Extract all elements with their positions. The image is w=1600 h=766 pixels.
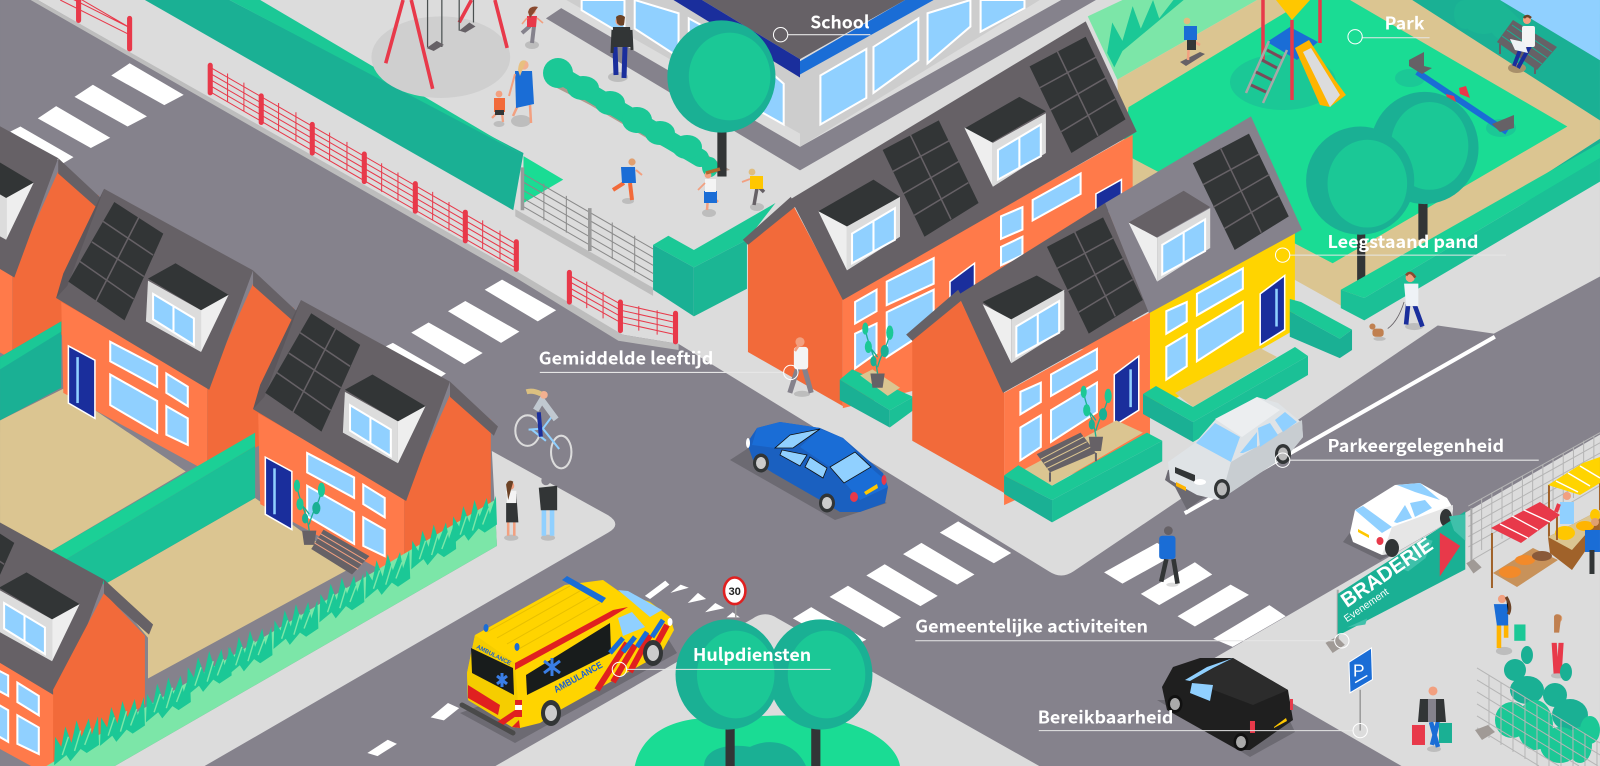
rear face	[467, 635, 520, 728]
bottom bush	[635, 716, 900, 766]
star of life	[497, 658, 560, 687]
trees: park	[1306, 92, 1479, 281]
grey fence gate	[515, 167, 653, 296]
sand path	[1117, 0, 1600, 306]
front wall	[843, 135, 1133, 408]
bench and plant: front orange house	[1037, 386, 1112, 482]
windscreen	[618, 590, 662, 617]
school blue trim	[673, 0, 800, 78]
solar panels	[1047, 217, 1143, 334]
label: Hulpdiensten	[612, 641, 831, 677]
dormer 2	[964, 97, 1046, 187]
white car	[1343, 483, 1453, 560]
blue car	[730, 422, 888, 520]
shadow	[730, 447, 887, 520]
roof dark part	[958, 203, 1149, 393]
planter: yellow house	[1143, 347, 1308, 442]
cyclist with bicycle	[515, 391, 571, 468]
windows and door	[855, 173, 1121, 368]
red fence: top left corner	[60, 0, 130, 49]
ambulance text side: AMBULANCE	[552, 660, 605, 696]
dormer right	[1129, 191, 1210, 282]
banner: braderie: Evenement	[1342, 587, 1391, 625]
seesaw	[1395, 52, 1516, 137]
house: far left	[0, 77, 106, 359]
plant and bench: front yard	[294, 480, 369, 574]
park: backdrop	[1088, 0, 1600, 306]
roof ridges	[487, 586, 600, 650]
tail light and headlight	[515, 618, 673, 717]
label: Park: Park	[1385, 10, 1425, 35]
label: School: School	[810, 9, 870, 34]
ambulance text rear: AMBULANCE	[475, 644, 512, 667]
label: Parkeergelegenheid	[1275, 432, 1539, 467]
person: woman walking dog	[1369, 273, 1423, 341]
windows	[1355, 483, 1440, 533]
lower side	[1382, 505, 1453, 555]
stall: yellow awning	[1548, 457, 1600, 570]
rear deck	[845, 467, 888, 500]
corner hedge near gate	[653, 203, 776, 316]
bush shade	[704, 742, 806, 766]
gable wall	[748, 201, 843, 406]
banner: braderie	[1325, 508, 1482, 653]
person: girl running	[698, 169, 720, 217]
speed limit sign 30: 30	[728, 586, 741, 598]
school building	[546, 0, 1096, 170]
person: man in black sweater	[608, 15, 632, 82]
body	[1168, 397, 1303, 500]
label: Bereikbaarheid	[1038, 703, 1367, 738]
roof	[1215, 397, 1280, 437]
body	[1350, 483, 1453, 555]
house: with solar panels, left	[56, 189, 301, 471]
top left green hedge	[145, 0, 563, 210]
label: Leegstaand pand	[1275, 228, 1506, 262]
grille and plate	[1175, 467, 1206, 491]
plate and rear lights	[1250, 699, 1293, 733]
stall: red awning	[1491, 502, 1560, 588]
label: Gemiddelde leeftijd	[539, 344, 798, 380]
hedge: between plots	[51, 433, 255, 585]
wheels	[1214, 444, 1291, 499]
person: man talking	[539, 476, 557, 541]
tree: school	[667, 20, 776, 177]
wheels	[1385, 509, 1452, 557]
beacons	[484, 624, 520, 651]
orange front wall	[1004, 312, 1150, 505]
school walls	[566, 0, 800, 134]
bushes behind fence bottom right	[1495, 646, 1600, 763]
planter: front orange house	[1004, 420, 1162, 522]
person: crossing walker	[1159, 526, 1179, 587]
label: Leegstaand pand: Leegstaand pand	[1328, 228, 1479, 253]
rear window	[471, 648, 514, 695]
grass blades	[1107, 0, 1184, 67]
yellow front wall	[1150, 233, 1295, 413]
body	[747, 422, 888, 512]
school windows	[582, 0, 1024, 124]
roof light part	[1105, 116, 1302, 313]
lower side	[1218, 420, 1303, 500]
school hedge shrubs	[543, 58, 730, 177]
silver SUV	[1165, 397, 1303, 510]
label: Gemeentelijke activiteiten	[915, 613, 1349, 648]
shadow	[460, 637, 677, 743]
body	[1162, 658, 1293, 750]
blue light bar	[562, 576, 606, 603]
house: with solar panels, right	[253, 300, 498, 583]
person: customer in blue	[1585, 518, 1600, 574]
roof	[791, 21, 1137, 300]
grass strip with blades	[46, 496, 497, 766]
parking sign	[1349, 648, 1372, 731]
park hedge along sidewalk	[1341, 143, 1600, 320]
person: woman talking	[504, 481, 518, 541]
shadow	[1343, 530, 1400, 560]
school plinth	[546, 0, 1096, 170]
parking lane line	[1185, 337, 1495, 513]
label: Gemiddelde leeftijd: Gemiddelde leeftijd	[539, 344, 713, 369]
label: Bereikbaarheid: Bereikbaarheid	[1038, 703, 1173, 728]
planter: rear house	[840, 369, 913, 428]
person: girl in red	[522, 7, 543, 49]
windows yellow house	[1166, 268, 1285, 380]
person: boy in yellow	[742, 169, 764, 211]
sidewalk: bottom right market	[1214, 435, 1600, 766]
dormer 1	[818, 180, 900, 270]
barge board	[743, 197, 796, 245]
shadow	[1165, 440, 1300, 510]
light grass strip	[1088, 0, 1257, 80]
solar panels	[883, 120, 979, 237]
curb shadow along the school block	[31, 0, 679, 350]
plant: rear house	[862, 322, 893, 388]
label: School	[773, 9, 870, 42]
zebra crossing: centre	[793, 521, 1011, 649]
fence bottom right	[1475, 668, 1600, 766]
shrub behind bench	[1454, 0, 1531, 42]
side window	[526, 623, 611, 695]
ambulance	[460, 576, 677, 743]
hedge: far left	[0, 321, 61, 420]
dark green verge	[1347, 0, 1600, 296]
person: runner in blue	[613, 158, 642, 204]
red fence: along the road	[210, 65, 516, 269]
windscreen	[1185, 658, 1233, 681]
road markings and give way triangles	[367, 581, 740, 756]
left block: sand plots	[0, 389, 352, 679]
person: man on phone	[790, 337, 811, 397]
label: Park	[1348, 10, 1430, 44]
black van	[1157, 658, 1295, 757]
banner: braderie: BRADERIE	[1337, 534, 1437, 612]
body	[467, 580, 674, 728]
zebra crossing: middle	[385, 280, 556, 379]
sidewalk: bottom left	[114, 451, 615, 766]
plate and light	[1358, 529, 1383, 545]
shadow	[1157, 700, 1295, 757]
front window	[618, 612, 645, 636]
barge board	[906, 290, 963, 341]
windows	[775, 429, 871, 483]
windscreen	[1196, 423, 1240, 462]
trees: bottom	[676, 619, 872, 766]
labels	[539, 9, 1539, 738]
person: man with shopping bags	[1412, 686, 1452, 752]
red stripe	[515, 607, 628, 670]
zebra crossing: right	[1104, 543, 1286, 647]
person: woman with bag	[1494, 595, 1525, 655]
red fence: by hedge	[569, 272, 676, 342]
side windows	[1240, 412, 1297, 453]
roof	[1190, 658, 1288, 705]
person: skateboarder	[1180, 18, 1205, 66]
label: Gemeentelijke activiteiten: Gemeentelijke activiteiten	[915, 613, 1148, 638]
person: woman in blue dress	[509, 60, 534, 127]
bumper	[462, 705, 513, 733]
sidewalk: school and row houses block	[38, 0, 1600, 575]
playground climbing frame	[1230, 0, 1346, 110]
playground swings	[371, 0, 510, 98]
person: child in orange	[492, 91, 505, 127]
plate and lights	[746, 438, 886, 502]
house: bottom left	[0, 498, 153, 766]
wheels	[541, 640, 663, 726]
gable wall	[912, 296, 1004, 493]
wheels	[1167, 695, 1248, 751]
dormer left	[983, 276, 1065, 363]
house row: front orange and yellow	[906, 116, 1302, 505]
roof and hood	[752, 422, 820, 448]
chevrons	[597, 625, 667, 690]
school roof	[702, 0, 905, 59]
speed limit sign 30	[724, 578, 745, 618]
bench with man and laptop	[1497, 16, 1557, 74]
vendor	[1556, 492, 1574, 524]
side window	[1190, 683, 1213, 701]
market fence back	[1468, 433, 1600, 559]
label: Hulpdiensten: Hulpdiensten	[693, 641, 811, 666]
sky corner	[1500, 0, 1600, 60]
zebra crossing: top left	[10, 63, 184, 163]
parking sign: P	[1353, 661, 1365, 681]
windows orange house	[1020, 349, 1139, 460]
house row: rear with solar panels	[743, 21, 1137, 408]
label: Parkeergelegenheid: Parkeergelegenheid	[1328, 432, 1504, 457]
park lawn	[1122, 0, 1567, 263]
person: woman in red trousers	[1551, 614, 1565, 679]
planter: side yellow house	[1290, 299, 1352, 358]
sidewalk: bottom centre island	[495, 614, 1040, 766]
rear stripes	[468, 685, 520, 728]
wheels	[753, 453, 835, 512]
